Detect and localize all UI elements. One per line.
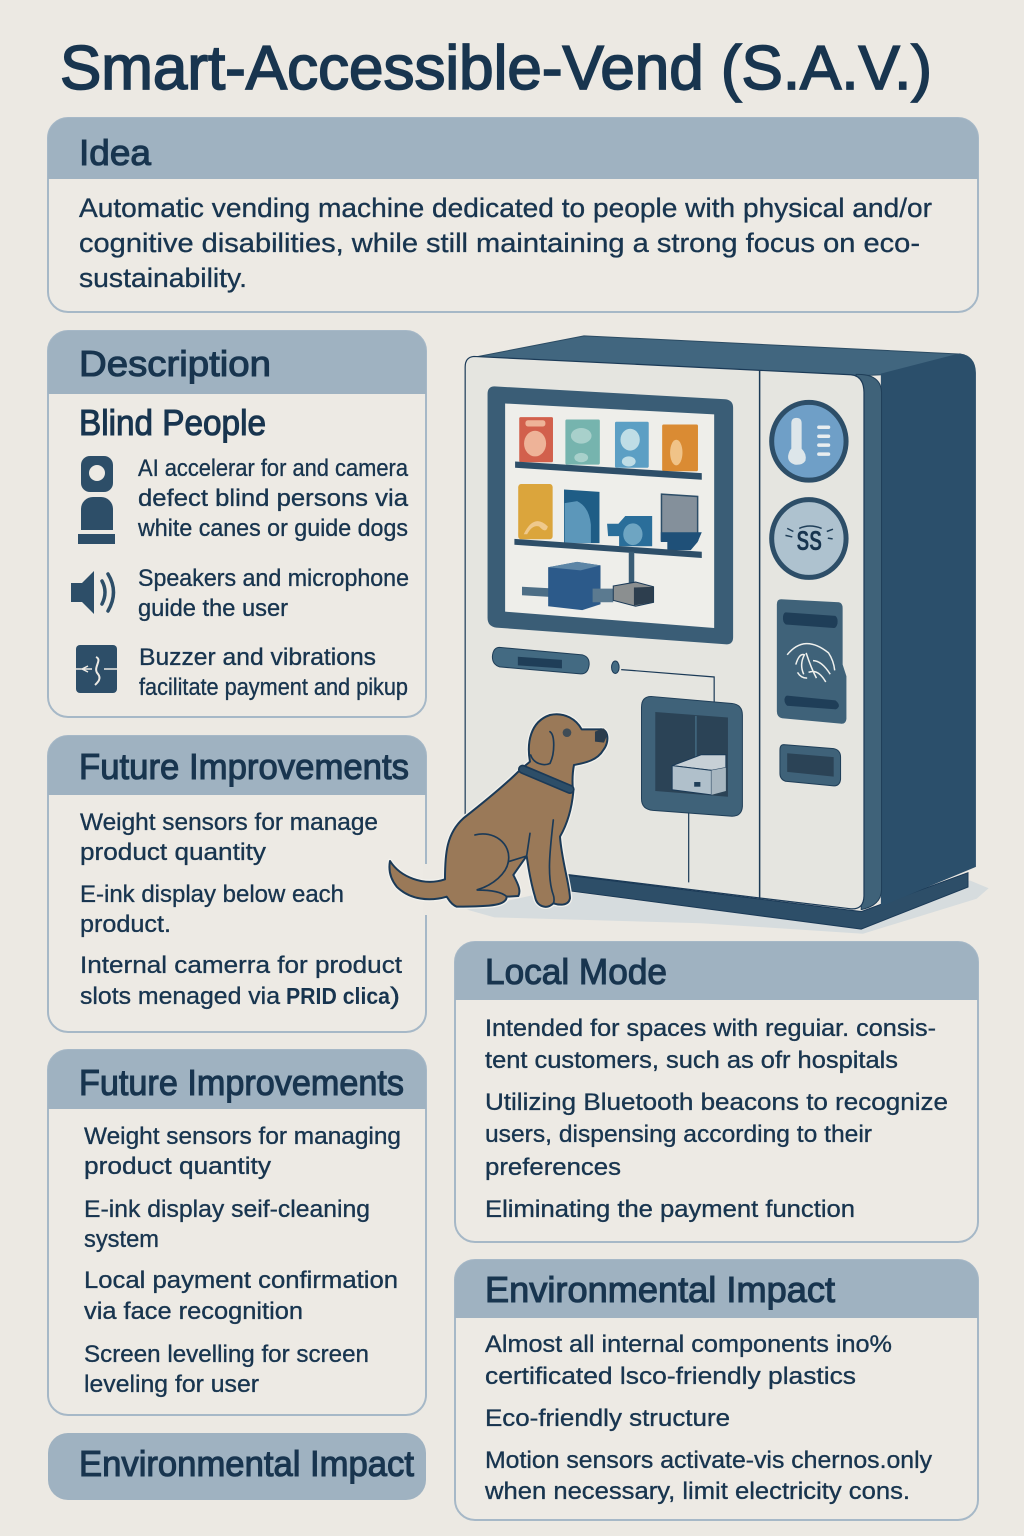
text: camera feature: defect blind persons via: [138, 485, 409, 512]
thermometer gauge: [772, 402, 846, 480]
text: future improvements 1 list: PRID clica: [286, 983, 390, 1009]
text: camera feature: white canes or guide dogs: [137, 515, 408, 542]
heading: environmental impact left: Environmental Impact: [79, 1443, 414, 1484]
text: idea body: [79, 193, 932, 293]
text: idea body: cognitive disabilities, while still maintaining a strong focus on eco-: [79, 228, 920, 258]
dog nose: [595, 728, 607, 743]
panel: environmental impact right: [455, 1260, 978, 1520]
heading: description: Description: [79, 343, 271, 384]
text: environmental impact list: certificated lsco-friendly plastics: [485, 1363, 856, 1390]
shelf 1: [515, 461, 702, 480]
shelf products row 2: [518, 484, 702, 550]
panel: future improvements 2: [48, 1050, 426, 1415]
dog body: [389, 714, 607, 907]
text: future improvements 2 list: [84, 1123, 401, 1398]
heading: idea: Idea: [79, 132, 152, 173]
subheading: blind people: Blind People: [79, 402, 266, 443]
text: future improvements 2 list: system: [84, 1226, 159, 1253]
text: future improvements 2 list: E-ink display seif-cleaning: [84, 1196, 370, 1223]
text: speaker feature: [138, 565, 409, 622]
sensor with wire: [612, 661, 714, 882]
text: buzzer feature: Buzzer and vibrations: [139, 644, 376, 671]
floor shadow: [467, 880, 989, 934]
heading: local mode: Local Mode: [485, 951, 667, 992]
speed gauge: [772, 500, 846, 577]
machine base: [562, 873, 968, 929]
text: local mode list: tent customers, such as ofr hospitals: [485, 1047, 898, 1074]
text: buzzer feature: [139, 644, 408, 701]
text: camera feature: [137, 455, 409, 542]
text: future improvements 1 list: product.: [80, 911, 171, 938]
machine side: [881, 353, 976, 906]
text: environmental impact list: [484, 1331, 932, 1505]
dog eye: [563, 728, 571, 737]
text: local mode list: Intended for spaces with reguiar. consis-: [485, 1015, 936, 1042]
text: environmental impact list: Eco-friendly structure: [485, 1405, 730, 1432]
machine top: [470, 336, 961, 376]
text: idea body: sustainability.: [79, 263, 247, 293]
machine side rim: [856, 374, 882, 910]
title: Smart-Accessible-Vend (S.A.V.): [60, 34, 932, 103]
text: future improvements 1 list: ): [390, 983, 400, 1010]
text: future improvements 1 list: Internal camerra for product: [80, 952, 402, 979]
text: future improvements 1 list: Weight sensors for manage: [80, 809, 378, 836]
text: local mode list: [485, 1015, 948, 1223]
text: local mode list: users, dispensing according to their: [485, 1121, 872, 1148]
heading: future improvements 2: Future Improvements: [79, 1062, 404, 1103]
text: future improvements 2 list: Screen levelling for screen: [84, 1341, 369, 1368]
text: local mode list: preferences: [485, 1154, 621, 1181]
text: local mode list: Utilizing Bluetooth beacons to recognize: [485, 1089, 948, 1116]
panel: idea: [48, 118, 978, 312]
text: local mode list: Eliminating the payment function: [485, 1196, 855, 1223]
text: future improvements 1 list: product quantity: [80, 839, 266, 866]
text: future improvements 2 list: product quantity: [84, 1153, 271, 1180]
text: future improvements 1 list: [80, 809, 402, 1010]
dog collar: [523, 769, 570, 789]
text: future improvements 1 list: E-ink display below each: [80, 881, 344, 908]
illustration: guide dog: [389, 714, 607, 907]
text: speaker feature: Speakers and microphone: [138, 565, 409, 592]
dispensing mechanism: [522, 552, 654, 610]
icon: vibration: [76, 645, 117, 693]
panel: description: [48, 331, 426, 717]
panel: environmental impact left: [48, 1433, 426, 1500]
icon: camera on stand: [78, 456, 115, 544]
text: speaker feature: guide the user: [138, 595, 288, 622]
indicator slot: [492, 647, 589, 674]
heading: future improvements 1: Future Improvements: [79, 746, 409, 787]
text: environmental impact list: Motion sensors activate-vis chernos.only: [485, 1447, 932, 1474]
text: environmental impact list: Almost all internal components ino%: [485, 1331, 892, 1358]
text: buzzer feature: facilitate payment and pikup: [139, 674, 408, 701]
illustration: vending machine: [465, 336, 989, 934]
payment panel with NFC symbol: [777, 599, 846, 724]
icon: speaker: [71, 571, 114, 614]
text: camera feature: AI accelerar for and camera: [138, 455, 409, 482]
speed gauge: SS: [796, 525, 822, 557]
text: future improvements 1 list: slots menaged via: [80, 983, 281, 1010]
heading: environmental impact right: Environmental Impact: [485, 1269, 835, 1310]
coin return slot: [780, 745, 841, 786]
text: future improvements 2 list: via face recognition: [84, 1298, 303, 1325]
shelf products row 1: [519, 417, 698, 471]
text: future improvements 2 list: leveling for user: [84, 1371, 259, 1398]
pickup compartment: [641, 696, 742, 816]
machine front: [465, 356, 864, 909]
panel: local mode: [455, 942, 978, 1242]
display screen: [488, 386, 733, 644]
text: idea body: Automatic vending machine dedicated to people with physical and/or: [79, 193, 932, 223]
text: environmental impact list: when necessary, limit electricity cons.: [484, 1478, 910, 1505]
text: future improvements 2 list: Weight sensors for managing: [84, 1123, 401, 1150]
dog details: [475, 732, 554, 903]
shelf 2: [514, 539, 702, 558]
panel: future improvements 1: [48, 736, 429, 1032]
text: future improvements 2 list: Local payment confirmation: [84, 1267, 398, 1294]
